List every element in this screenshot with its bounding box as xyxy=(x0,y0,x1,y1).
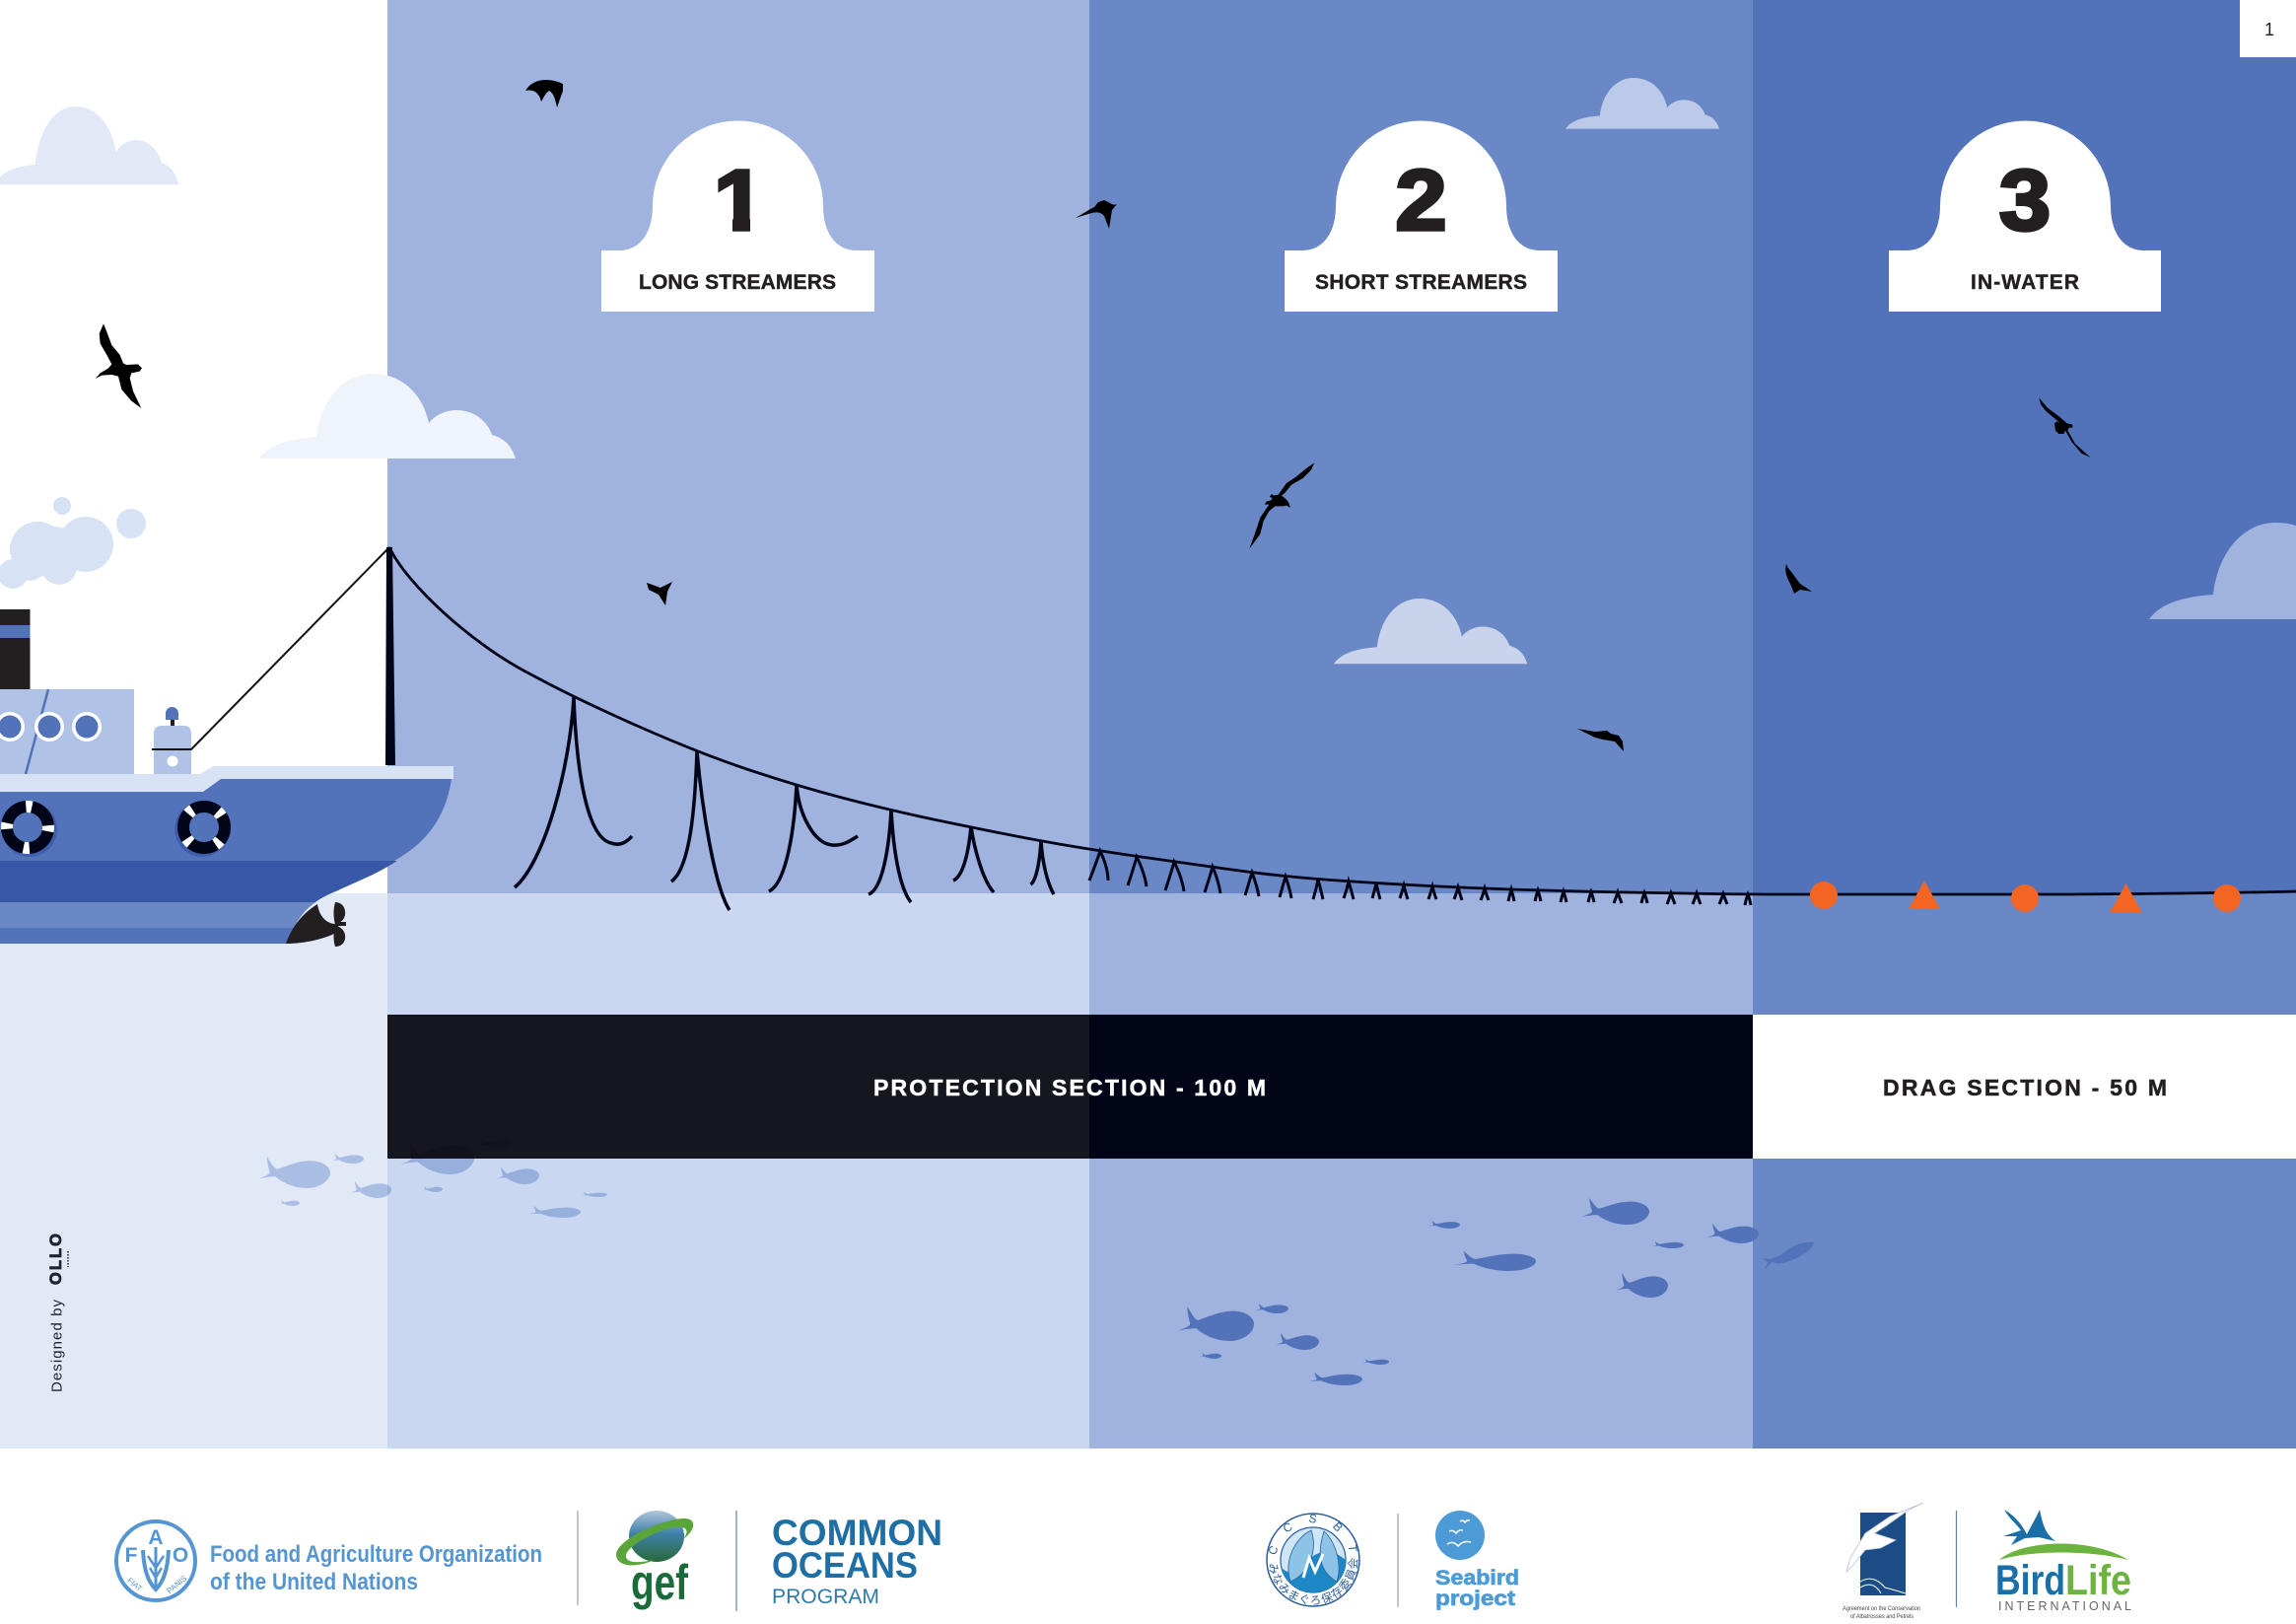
short streamers on line xyxy=(1089,851,1751,905)
logo: Common Oceans Program: OCEANS xyxy=(772,1545,918,1586)
bird 2 xyxy=(1076,200,1117,229)
ship xyxy=(0,497,453,947)
badge 3: in-water: 3 xyxy=(1999,153,2051,248)
bird 4 xyxy=(1249,462,1314,549)
panel: long streamers column xyxy=(387,0,1090,1448)
deck hut xyxy=(154,707,191,774)
rudder and propeller xyxy=(286,902,346,947)
hull xyxy=(0,779,452,861)
badge 3: in-water: IN-WATER xyxy=(1971,271,2079,294)
logo: GEF: gef xyxy=(631,1555,688,1610)
badge 2: short streamers: 2 xyxy=(1395,153,1447,248)
badge 1: long streamers: 1 xyxy=(714,153,765,248)
badge 2: short streamers: SHORT STREAMERS xyxy=(1315,271,1527,294)
panel: ship zone background xyxy=(0,0,387,1448)
cloud: over ship zone edge xyxy=(259,374,516,459)
drag section bar xyxy=(1753,1015,2296,1159)
divider xyxy=(577,1511,579,1605)
logo: FAO wordmark xyxy=(210,1541,542,1595)
logo: FAO wordmark: of the United Nations xyxy=(210,1569,418,1595)
logo: BirdLife International xyxy=(1995,1510,2131,1613)
badge 1: long streamers: LONG STREAMERS xyxy=(639,271,836,294)
long streamers on line xyxy=(515,697,1054,910)
logo: CCSBT: CCSBT xyxy=(1269,1515,1357,1554)
bird 7 xyxy=(1785,564,1812,594)
smoke xyxy=(0,497,146,589)
bird 8 xyxy=(1577,729,1624,751)
panel: in-water column xyxy=(1753,0,2296,1448)
logo: ACAP albatross xyxy=(1843,1503,1923,1620)
fish shoal: right xyxy=(1178,1198,1814,1385)
page number xyxy=(2240,0,2296,57)
panel: short streamers column xyxy=(1089,0,1753,1448)
lifebuoy left xyxy=(2,802,57,857)
cloud: top of short streamers xyxy=(1565,78,1719,129)
fish shoal: left xyxy=(258,1139,607,1218)
deck xyxy=(0,766,453,792)
hull dark stripe xyxy=(0,861,397,902)
logo: FAO wordmark: Food and Agriculture Organization xyxy=(210,1541,542,1568)
divider xyxy=(735,1511,737,1611)
logo: ACAP albatross: of Albatrosses and Petrels xyxy=(1850,1614,1913,1620)
logo: Seabird project: Seabird xyxy=(1435,1567,1519,1589)
bird 5 xyxy=(647,582,672,605)
badge 3: in-water xyxy=(1889,120,2161,312)
designer credit: Designed by xyxy=(49,1300,65,1392)
hull light stripe xyxy=(0,902,315,928)
keel stripe xyxy=(0,928,294,944)
logo: Common Oceans Program: COMMON xyxy=(772,1513,942,1553)
logo: BirdLife International: Bird xyxy=(1995,1557,2065,1604)
divider xyxy=(1956,1511,1958,1607)
rigging rope xyxy=(152,547,389,749)
logo: ACAP albatross: Agreement on the Conservation xyxy=(1843,1606,1920,1612)
logo: Seabird project: project xyxy=(1435,1588,1515,1610)
drag section bar: DRAG SECTION - 50 M xyxy=(1883,1075,2167,1100)
logo: FAO emblem: O xyxy=(173,1544,188,1567)
logo: BirdLife International: INTERNATIONAL xyxy=(1998,1599,2131,1613)
page number: 1 xyxy=(2264,20,2274,39)
logo: FAO emblem: F xyxy=(125,1544,138,1567)
logo: Common Oceans Program: PROGRAM xyxy=(772,1586,879,1608)
logo: CCSBT xyxy=(1266,1513,1360,1607)
bird 1 xyxy=(525,80,563,107)
main towing line xyxy=(389,547,2296,894)
logo: FAO emblem xyxy=(116,1521,195,1600)
mast xyxy=(385,547,395,765)
logo: BirdLife International: Life xyxy=(2065,1557,2131,1604)
cabin with portholes xyxy=(0,689,134,774)
logo: FAO emblem: PANIS xyxy=(166,1574,188,1595)
cloud: right edge xyxy=(2149,523,2296,619)
protection section bar: PROTECTION SECTION - 100 M xyxy=(873,1075,1266,1100)
bird 6 xyxy=(2039,397,2091,458)
footer: white strip xyxy=(0,1448,2296,1624)
bird 3 xyxy=(96,323,142,408)
floats: orange buoys xyxy=(1810,881,2241,912)
logo: FAO emblem: FIAT xyxy=(125,1576,144,1593)
logo: GEF xyxy=(616,1511,693,1610)
logo: FAO emblem: A xyxy=(148,1526,164,1549)
protection section bar xyxy=(387,1015,1753,1159)
designer credit: OLLO xyxy=(47,1234,65,1285)
cloud: middle of short streamers xyxy=(1334,599,1527,664)
designer credit xyxy=(47,1234,68,1392)
cloud: top left xyxy=(0,106,178,184)
logo: CCSBT: みなみまぐろ保存委員会 xyxy=(1270,1558,1358,1605)
lifebuoy right xyxy=(174,798,234,857)
badge 2: short streamers xyxy=(1285,120,1558,312)
badge 1: long streamers xyxy=(601,120,874,312)
funnel xyxy=(0,609,30,689)
logo: Common Oceans Program xyxy=(772,1513,942,1608)
divider xyxy=(1397,1514,1399,1607)
logo: Seabird project xyxy=(1435,1511,1519,1610)
